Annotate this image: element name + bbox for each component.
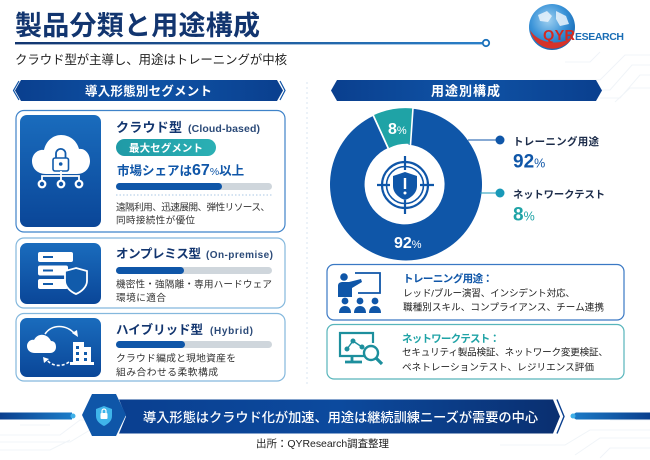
hybrid description: クラウド編成と現地資産を xyxy=(116,352,236,364)
legend: network test: ネットワークテスト xyxy=(513,189,605,201)
banner text: 導入形態はクラウド化が加速、用途は継続訓練ニーズが需要の中心 xyxy=(143,409,538,425)
icon: server with shield xyxy=(20,243,101,304)
hybrid english label: (Hybrid) xyxy=(210,326,253,337)
badge: largest segment: 最大セグメント xyxy=(129,142,203,154)
network test description: セキュリティ製品検証、ネットワーク変更検証、 xyxy=(402,346,608,358)
cloud description: 遠隔利用、迅速展開、弾性リソース、 xyxy=(116,202,270,214)
cloud share bar xyxy=(116,183,272,190)
label: 8%: 8% xyxy=(388,121,407,138)
panel: network test use xyxy=(327,324,624,379)
hybrid description: 組み合わせる柔軟構成 xyxy=(116,366,218,378)
logo: QYResearch: ESEARCH xyxy=(575,31,624,43)
section divider xyxy=(306,82,308,385)
legend: training: トレーニング用途 xyxy=(513,135,600,148)
legend: network test xyxy=(480,188,605,226)
panel: cloud-based xyxy=(16,110,285,232)
donut chart xyxy=(330,108,482,260)
donut segment: training 92% xyxy=(330,109,482,260)
on-premise description: 環境に適合 xyxy=(116,292,166,304)
icon: target shield xyxy=(377,156,434,214)
on-premise description xyxy=(116,278,272,304)
cloud description: 同時接続性が優位 xyxy=(116,214,195,226)
hybrid title: ハイブリッド型 xyxy=(116,322,203,337)
banner: key takeaway xyxy=(0,394,650,436)
on-premise share bar xyxy=(116,267,272,274)
legend: network test: 8% xyxy=(513,204,535,226)
network test description xyxy=(402,346,608,374)
label: 92%: 92% xyxy=(394,235,422,252)
cloud english label: (Cloud-based) xyxy=(188,123,260,135)
icon: instructor and audience xyxy=(338,273,381,313)
logo: QYResearch: QYR xyxy=(543,28,576,44)
market share text: 市場シェアは67%以上 xyxy=(117,162,244,179)
logo: QYResearch xyxy=(529,4,624,50)
heading: deployment segments: 導入形態別セグメント xyxy=(85,84,212,98)
hybrid description xyxy=(116,352,236,378)
panel: on-premise xyxy=(16,238,285,308)
badge: largest segment xyxy=(116,139,216,156)
on-premise description: 機密性・強隔離・専用ハードウェア xyxy=(116,278,272,290)
training use title: トレーニング用途： xyxy=(403,272,493,285)
legend: training: 92% xyxy=(513,152,545,172)
cloud title: クラウド型 xyxy=(116,120,182,135)
training use description: 職種別スキル、コンプライアンス、チーム連携 xyxy=(403,302,604,314)
heading: deployment segments xyxy=(14,80,285,101)
panel: training use xyxy=(327,264,624,320)
heading: usage composition: 用途別構成 xyxy=(431,84,500,98)
on-premise title: オンプレミス型 xyxy=(116,247,201,261)
source note: 出所：QYResearch調査整理 xyxy=(256,437,390,450)
icon: cloud with lock xyxy=(20,115,101,227)
title: 製品分類と用途構成 xyxy=(15,11,260,41)
network test title: ネットワークテスト： xyxy=(402,333,500,345)
title rule with end node xyxy=(15,40,489,46)
donut segment: network test 8% xyxy=(374,108,413,148)
on-premise english label: (On-premise) xyxy=(206,250,273,261)
panel: hybrid xyxy=(16,314,285,381)
network test description: ペネトレーションテスト、レジリエンス評価 xyxy=(402,362,594,374)
cloud description xyxy=(116,202,270,226)
legend: training xyxy=(468,135,600,172)
training use description: レッド/ブルー演習、インシデント対応、 xyxy=(403,288,575,300)
heading: usage composition xyxy=(331,80,602,101)
icon: cloud and building xyxy=(20,318,101,377)
icon: monitor with magnifier xyxy=(340,333,382,364)
icon: hexagon lock xyxy=(82,394,126,436)
hybrid share bar xyxy=(116,341,272,348)
subtitle: クラウド型が主導し、用途はトレーニングが中核 xyxy=(15,52,287,67)
training use description xyxy=(403,288,604,314)
